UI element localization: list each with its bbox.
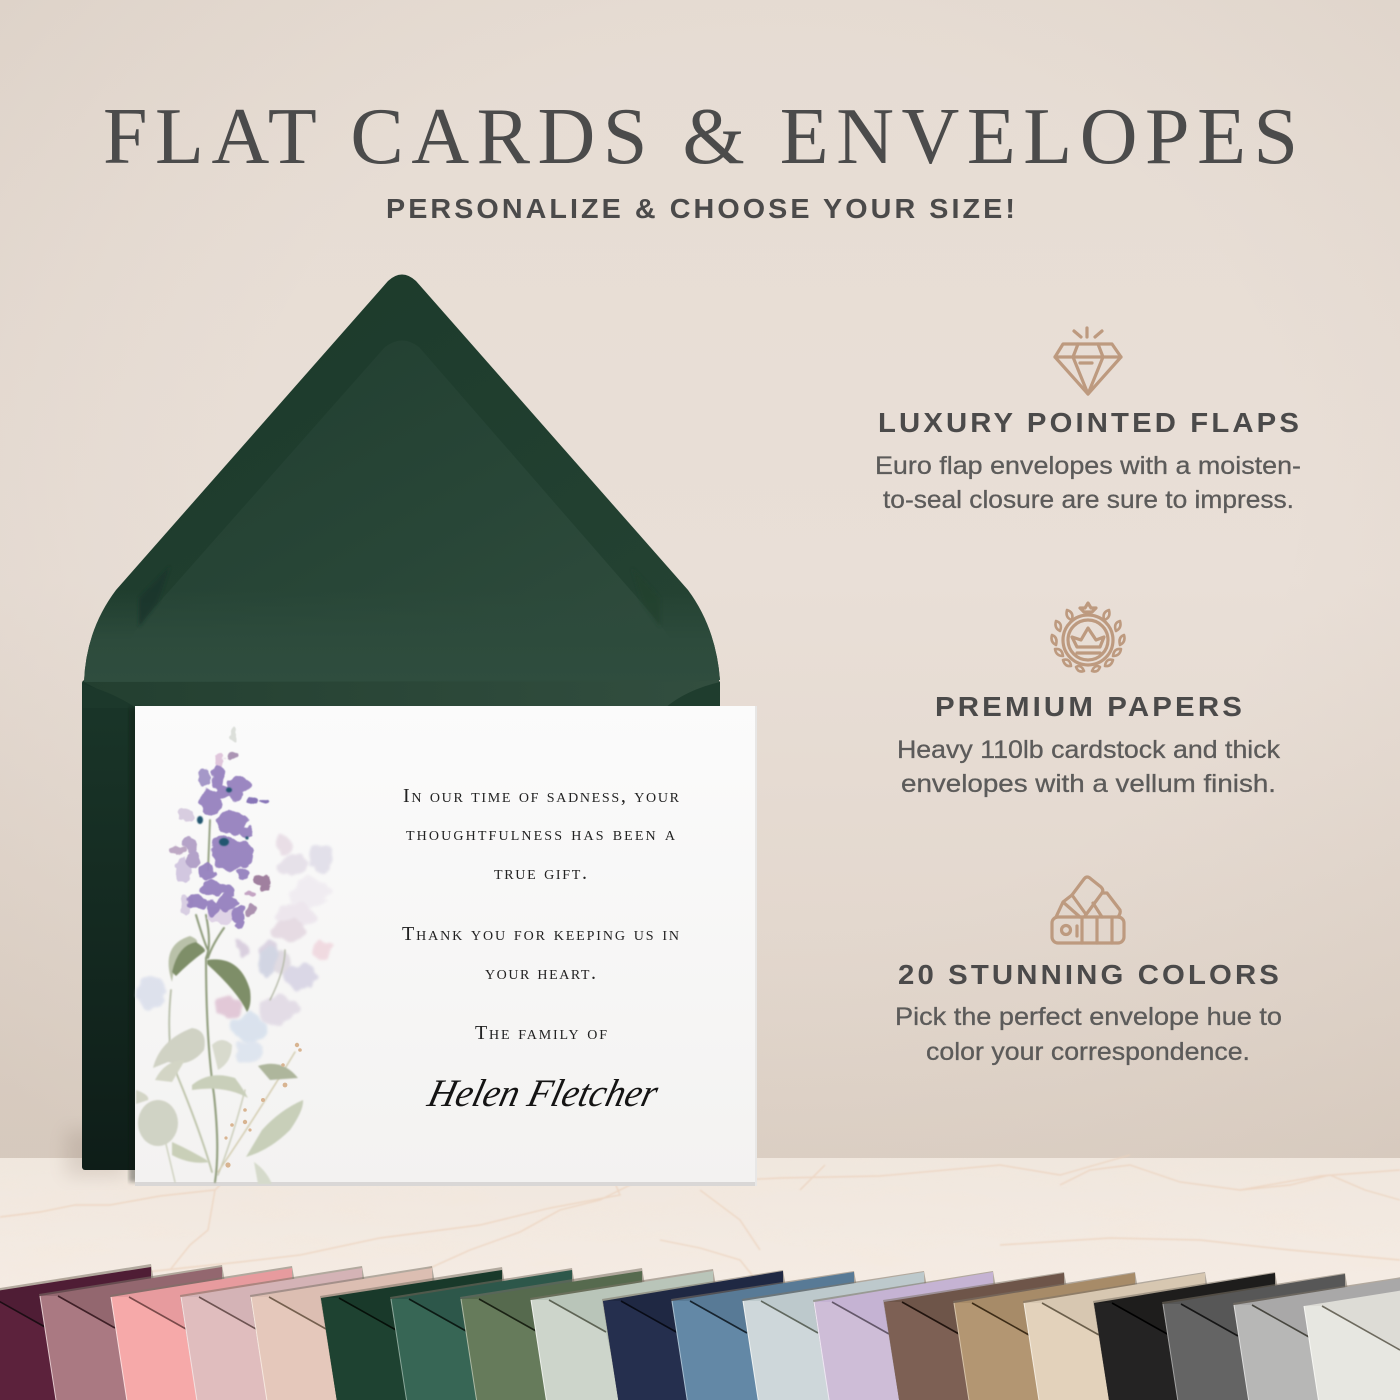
envelope swatch: tan: [953, 1272, 1138, 1400]
tan seed sprays: [224, 1043, 302, 1168]
envelope liner: [104, 340, 700, 682]
description: envelopes with a vellum finish.: [901, 770, 1276, 798]
green envelope: [82, 274, 720, 1170]
envelope pocket corners: [83, 682, 720, 708]
lower flap blend: [84, 590, 720, 682]
watercolor lilac illustration: [136, 729, 334, 1184]
envelope swatch: lilac: [813, 1271, 996, 1400]
description: [895, 1003, 1282, 1066]
card message: [402, 785, 680, 1044]
description: Pick the perfect envelope hue to: [895, 1003, 1282, 1031]
envelope swatch: off-white: [1304, 1277, 1400, 1400]
envelope swatch: teal: [390, 1268, 575, 1400]
deep lilac petals: [187, 765, 269, 930]
feature: 20 stunning colors: [895, 877, 1282, 1066]
envelope swatch: black: [1093, 1272, 1278, 1400]
envelope swatch: brown: [883, 1272, 1067, 1400]
envelope swatch: navy: [602, 1270, 786, 1400]
envelope swatch: pale sage: [530, 1269, 716, 1400]
heading: PREMIUM PAPERS: [935, 691, 1245, 722]
card message: The family of: [475, 1022, 607, 1044]
stems: [165, 820, 295, 1182]
flat card: [129, 706, 757, 1186]
envelope swatch: burgundy: [0, 1264, 154, 1400]
envelope flap: [84, 274, 720, 682]
icon: color swatch fan: [1052, 877, 1124, 943]
envelope swatch: blush: [180, 1266, 365, 1400]
envelope shadow on wall: [66, 1130, 126, 1176]
envelope swatch: slate blue: [671, 1271, 857, 1400]
heading: 20 STUNNING COLORS: [898, 959, 1282, 990]
envelope body: [82, 680, 720, 1170]
feature: premium papers: [897, 603, 1281, 798]
description: to-seal closure are sure to impress.: [883, 486, 1294, 514]
card message: Thank you for keeping us in: [402, 923, 679, 945]
heading: LUXURY POINTED FLAPS: [878, 407, 1302, 438]
card face: [135, 706, 757, 1184]
description: [897, 736, 1281, 798]
teal accents: [197, 788, 249, 846]
envelope swatch: sage: [460, 1268, 645, 1400]
liner corner folds: [139, 566, 660, 627]
marble table surface: [0, 1155, 1400, 1400]
envelope swatch: ice gray: [742, 1271, 927, 1400]
icon: crown badge: [1052, 603, 1124, 672]
envelope pocket top strip: [84, 680, 719, 708]
description: color your correspondence.: [926, 1038, 1250, 1066]
envelope swatch: light gray: [1233, 1275, 1400, 1400]
envelope swatch: peach: [250, 1266, 435, 1400]
title: FLAT CARDS & ENVELOPES: [103, 93, 1298, 181]
card bottom edge: [135, 1182, 757, 1186]
card message: true gift.: [494, 862, 587, 884]
pale back blossoms: [137, 835, 334, 1063]
envelope swatch: charcoal: [1162, 1273, 1348, 1400]
card shadow: [129, 708, 141, 1182]
card message: thoughtfulness has been a: [406, 823, 676, 845]
light lilac petals: [172, 729, 238, 924]
feature: luxury pointed flaps: [875, 328, 1302, 514]
envelope swatch: cream: [1023, 1272, 1208, 1400]
subtitle: PERSONALIZE & CHOOSE YOUR SIZE!: [386, 193, 1018, 224]
icon: diamond: [1055, 328, 1121, 394]
card message: In our time of sadness, your: [403, 785, 680, 807]
description: Heavy 110lb cardstock and thick: [897, 736, 1281, 764]
envelope swatch: pink: [110, 1266, 295, 1400]
card right edge: [755, 706, 757, 1186]
signature: Helen Fletcher: [423, 1072, 663, 1115]
row of 20 envelope color swatches: [0, 1264, 1400, 1400]
card message: your heart.: [485, 962, 596, 984]
mauve side blossom: [246, 874, 270, 895]
envelope swatch: dusty rose: [39, 1265, 225, 1400]
description: [875, 452, 1301, 514]
description: Euro flap envelopes with a moisten-: [875, 452, 1301, 480]
green leaves: [136, 936, 303, 1184]
envelope swatch: forest green: [320, 1267, 505, 1400]
